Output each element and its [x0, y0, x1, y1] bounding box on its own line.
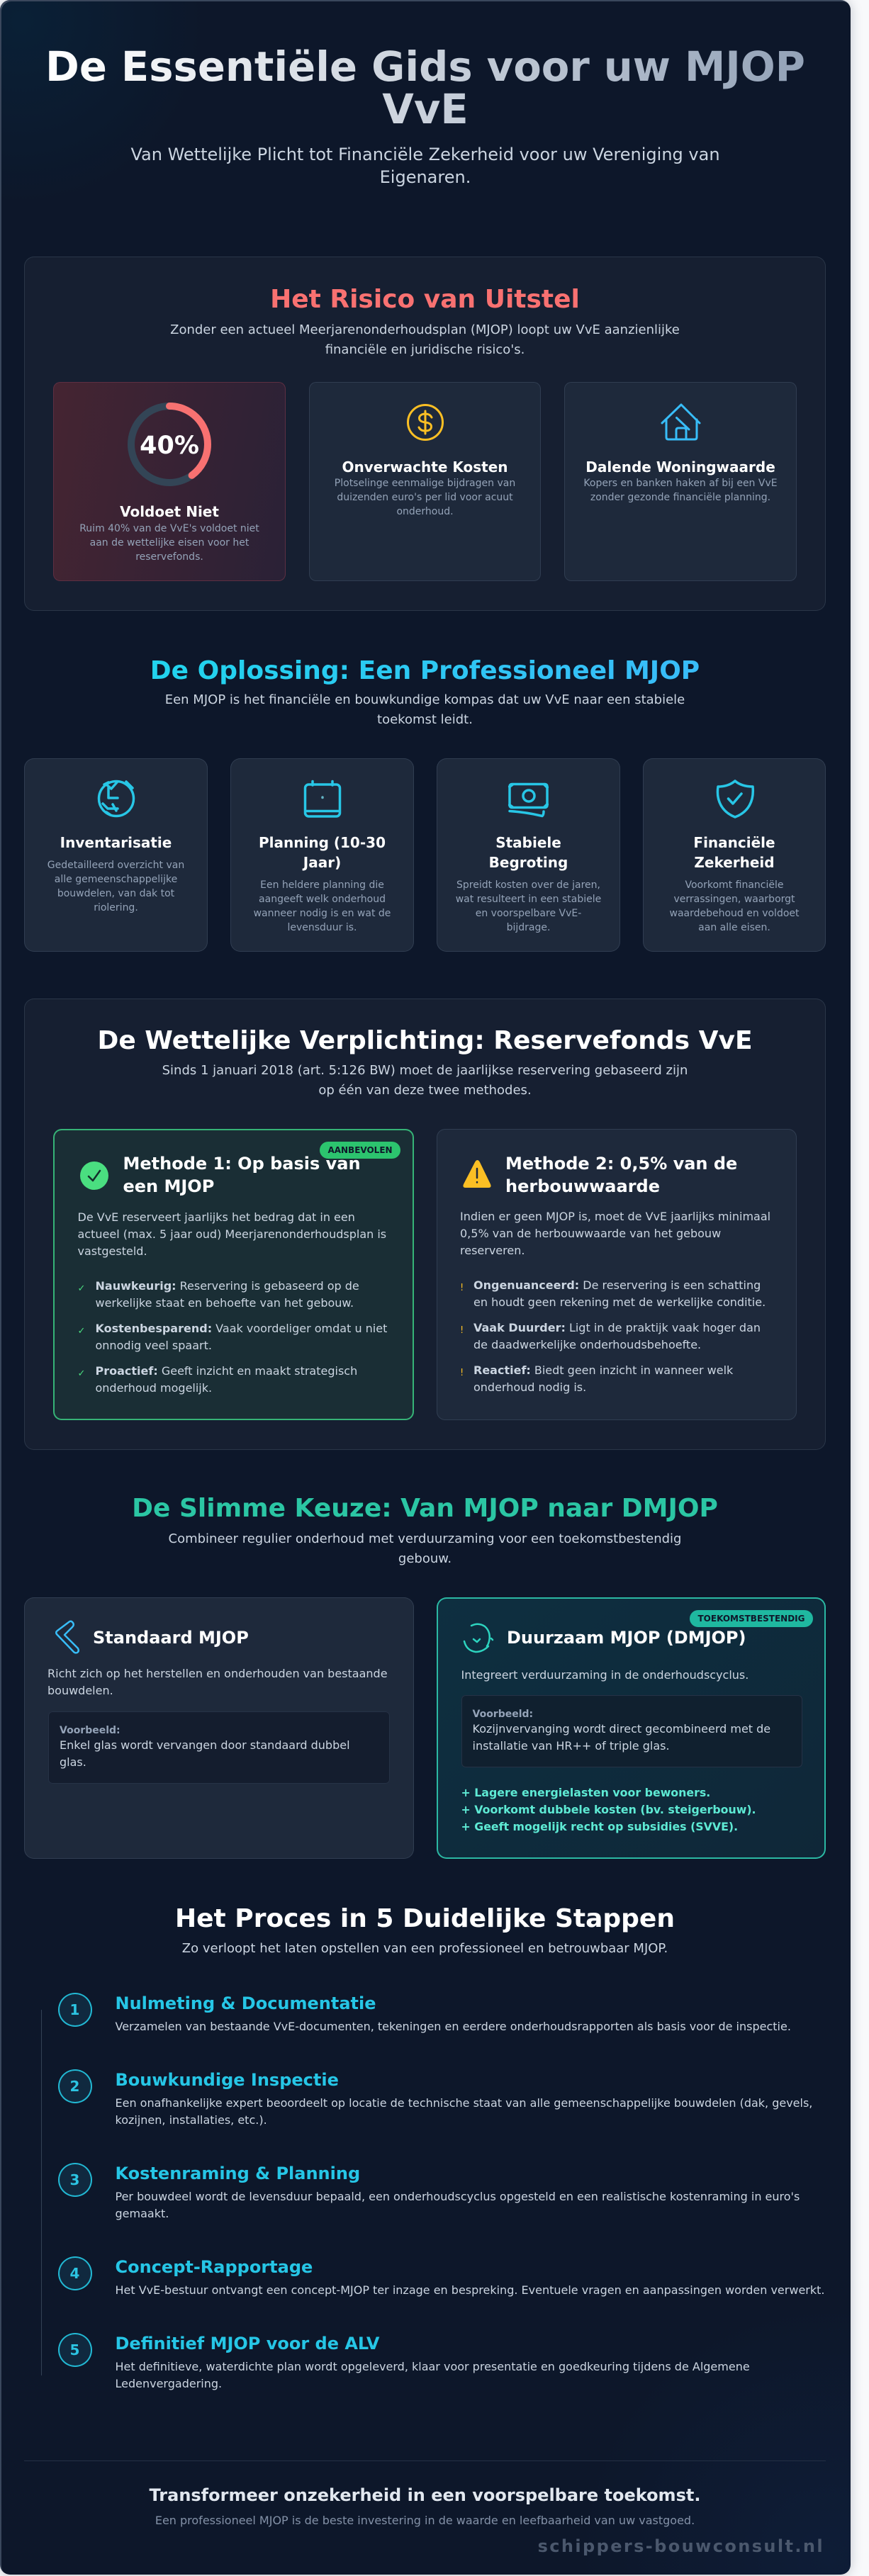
step title: Concept-Rapportage — [115, 2257, 313, 2277]
step number: 3 — [70, 2171, 79, 2188]
card text: bouwdelen, van dak tot — [57, 888, 174, 899]
card text: Spreidt kosten over de jaren, — [456, 879, 600, 891]
card text: aan de wettelijke eisen voor het — [90, 537, 249, 549]
icon: shield check — [716, 780, 754, 819]
card text: zonder gezonde financiële planning. — [590, 492, 770, 503]
card text: duizenden euro's per lid voor acuut — [337, 492, 513, 503]
step number — [58, 2333, 92, 2367]
card text: alle gemeenschappelijke — [55, 874, 177, 885]
icon: calendar — [303, 780, 342, 818]
step text: Het definitieve, waterdichte plan wordt opgeleverd, klaar voor presentatie en goedkeuring tijdens de Algemene — [115, 2360, 750, 2373]
text: solution intro: Een MJOP is het financiële en bouwkundige kompas dat uw VvE naar een stabiele — [165, 692, 685, 707]
point: reactief: ! — [460, 1368, 464, 1378]
card text: onderhoud. — [396, 506, 454, 517]
method 1 text: actueel (max. 5 jaar oud) Meerjarenonderhoudsplan is — [78, 1227, 386, 1241]
benefits list: + Voorkomt dubbele kosten (bv. steigerbouw). — [461, 1803, 756, 1816]
method 2 text: reserveren. — [460, 1244, 525, 1257]
example box — [461, 1695, 802, 1767]
icon: warning triangle — [463, 1160, 491, 1188]
card text — [47, 1667, 388, 1697]
text: solution intro — [165, 692, 685, 727]
card heading: Duurzaam MJOP (DMJOP) — [507, 1628, 746, 1648]
step number: 1 — [70, 2001, 79, 2018]
example text: glas. — [60, 1755, 86, 1769]
closing statement: Transformeer onzekerheid in een voorspelbare toekomst. — [150, 2485, 700, 2505]
method 2 heading: Methode 2: 0,5% van de — [505, 1154, 737, 1174]
card text: bijdrage. — [507, 922, 550, 933]
step text — [115, 2095, 812, 2128]
donut chart: 40 percent: 40% — [140, 432, 199, 460]
heading: risk: Het Risico van Uitstel — [270, 285, 580, 314]
card title: Planning (10-30 — [259, 834, 386, 851]
title: De Essentiële Gids voor uw MJOP — [45, 43, 805, 91]
card: standaard mjop — [24, 1597, 414, 1859]
example text — [472, 1721, 770, 1755]
title: VvE — [382, 86, 469, 133]
card: duurzaam mjop — [437, 1597, 826, 1859]
step 4 — [58, 2256, 825, 2307]
card text: Kopers en banken haken af bij een VvE — [583, 478, 778, 489]
card: planning — [230, 758, 414, 952]
card: onverwachte kosten — [309, 382, 541, 581]
card title: Financiële — [693, 834, 775, 851]
card title — [489, 834, 568, 871]
card: method 1 — [53, 1129, 414, 1420]
point: nauwkeurig: ✓ — [78, 1283, 85, 1294]
point: kostenbesparend — [78, 1321, 387, 1352]
point: kostenbesparend: Kostenbesparend: Vaak voordeliger omdat u niet — [95, 1321, 387, 1335]
point: vaak duurder: ! — [460, 1325, 464, 1336]
text: legal intro: Sinds 1 januari 2018 (art. 5:126 BW) moet de jaarlijkse reservering gebaseerd zijn — [162, 1063, 688, 1078]
step number: 4 — [70, 2265, 79, 2282]
text: smart choice intro: gebouw. — [398, 1551, 452, 1566]
card title — [259, 834, 386, 871]
method 2 heading — [505, 1154, 737, 1196]
card text: verrassingen, waarborgt — [673, 894, 795, 905]
step title: Nulmeting & Documentatie — [115, 1993, 376, 2013]
method 2 heading: herbouwwaarde — [505, 1176, 660, 1196]
example box — [48, 1711, 390, 1784]
example text: Kozijnvervanging wordt direct gecombineerd met de — [472, 1722, 770, 1736]
card text — [254, 879, 391, 933]
card text: Plotselinge eenmalige bijdragen van — [335, 478, 515, 489]
point: vaak duurder — [460, 1321, 761, 1351]
card text: levensduur is. — [287, 922, 357, 933]
step title: Kostenraming & Planning — [115, 2164, 360, 2183]
donut chart: 40 percent — [128, 403, 211, 486]
point: reactief: Reactief: Biedt geen inzicht in wanneer welk — [473, 1363, 733, 1377]
point: reactief — [460, 1363, 733, 1394]
icon: globe — [98, 780, 135, 818]
card text — [583, 478, 778, 503]
panel: risk of delay — [24, 257, 826, 611]
heading: legal: De Wettelijke Verplichting: Reservefonds VvE — [97, 1026, 753, 1055]
heading: solution: De Oplossing: Een Professioneel MJOP — [150, 656, 700, 685]
method 1 text: vastgesteld. — [78, 1244, 147, 1258]
step title: Bouwkundige Inspectie — [115, 2070, 339, 2090]
card text: aan alle eisen. — [698, 922, 770, 933]
card: inventarisatie — [24, 758, 208, 952]
text: legal intro — [162, 1063, 688, 1098]
card heading: Standaard MJOP — [93, 1628, 249, 1648]
badge: aanbevolen: AANBEVOLEN — [327, 1145, 393, 1155]
card title: Zekerheid — [694, 854, 775, 871]
text: solution intro: toekomst leidt. — [377, 712, 473, 727]
closing text: Een professioneel MJOP is de beste investering in de waarde en leefbaarheid van uw vastgoed. — [155, 2514, 695, 2527]
point: ongenuanceerd: Ongenuanceerd: De reservering is een schatting — [473, 1278, 761, 1292]
method 1 text — [78, 1210, 386, 1258]
benefits list — [461, 1784, 756, 1835]
point: nauwkeurig: werkelijke staat en behoefte van het gebouw. — [95, 1295, 354, 1310]
section: process — [24, 1899, 826, 2402]
step 2 — [58, 2069, 825, 2137]
subtitle: Van Wettelijke Plicht tot Financiële Zekerheid voor uw Vereniging van — [130, 145, 720, 164]
method 2 text: Indien er geen MJOP is, moet de VvE jaarlijks minimaal — [460, 1210, 770, 1223]
title — [0, 46, 851, 131]
benefits list: + Geeft mogelijk recht op subsidies (SVVE). — [461, 1820, 738, 1833]
card title: Stabiele — [495, 834, 561, 851]
badge: aanbevolen — [320, 1142, 400, 1159]
heading: smart choice: De Slimme Keuze: Van MJOP naar DMJOP — [132, 1494, 718, 1523]
text: smart choice intro: Combineer regulier onderhoud met verduurzaming voor een toekomstbestendig — [169, 1531, 681, 1546]
card text: riolering. — [94, 902, 138, 913]
card text — [669, 879, 800, 933]
example label: Voorbeeld: — [60, 1725, 120, 1736]
icon: standard — [55, 1620, 79, 1654]
card text: wat resulteert in een stabiele — [456, 894, 601, 905]
text: process intro: Zo verloopt het laten opstellen van een professioneel en betrouwbaar MJOP. — [182, 1941, 668, 1956]
method 1 heading: een MJOP — [123, 1176, 214, 1196]
card: stabiele begroting — [437, 758, 620, 952]
card: method 2 — [437, 1129, 797, 1420]
example text: Enkel glas wordt vervangen door standaard dubbel — [60, 1738, 350, 1752]
point: ongenuanceerd — [460, 1278, 766, 1309]
icon: banknote — [508, 782, 549, 818]
card text: wanneer nodig is en wat de — [254, 908, 391, 919]
step text: Ledenvergadering. — [115, 2377, 222, 2390]
section: solution — [24, 656, 826, 952]
text: risk intro: Zonder een actueel Meerjarenonderhoudsplan (MJOP) loopt uw VvE aanzienlijke — [170, 322, 680, 337]
step text — [115, 2188, 800, 2222]
method 1 heading — [123, 1154, 361, 1196]
method 1 text: De VvE reserveert jaarlijks het bedrag dat in een — [78, 1210, 355, 1224]
point: kostenbesparend: ✓ — [78, 1325, 85, 1337]
step number — [58, 1993, 92, 2027]
step text: Een onafhankelijke expert beoordeelt op locatie de technische staat van alle gemeenschappelijke bouwdelen (dak, gevels, — [115, 2096, 812, 2110]
point: proactief: ✓ — [78, 1368, 85, 1379]
point: ongenuanceerd: ! — [460, 1283, 464, 1293]
point: kostenbesparend: onnodig veel spaart. — [95, 1338, 212, 1352]
card text: Gedetailleerd overzicht van — [47, 860, 184, 871]
step number: 2 — [70, 2078, 79, 2095]
method 2 text: 0,5% van de herbouwwaarde van het gebouw — [460, 1227, 721, 1240]
card text: Integreert verduurzaming in de onderhoudscyclus. — [461, 1668, 749, 1681]
card: dalende woningwaarde — [564, 382, 797, 581]
point: reactief: onderhoud nodig is. — [473, 1380, 586, 1394]
card title — [693, 834, 775, 871]
card title: Begroting — [489, 854, 568, 871]
step number — [58, 2163, 92, 2197]
card text: reservefonds. — [135, 551, 203, 563]
heading: solution — [24, 656, 826, 687]
point: vaak duurder: de daadwerkelijke onderhoudsbehoefte. — [473, 1338, 701, 1351]
website watermark: schippers-bouwconsult.nl — [538, 2536, 824, 2556]
method 1 heading: Methode 1: Op basis van — [123, 1154, 361, 1174]
step text — [115, 2358, 750, 2392]
badge: toekomstbestendig — [690, 1610, 813, 1627]
icon: sustainable — [464, 1623, 493, 1653]
card title: Jaar) — [303, 854, 341, 871]
card text: aangeeft welk onderhoud — [259, 894, 386, 905]
text: risk intro: financiële en juridische risico's. — [325, 342, 525, 357]
step text: Het VvE-bestuur ontvangt een concept-MJOP ter inzage en bespreking. Eventuele vragen en aanpassingen worden verwerkt. — [115, 2283, 824, 2297]
card title: Voldoet Niet — [120, 503, 219, 520]
heading: process: Het Proces in 5 Duidelijke Stappen — [175, 1904, 675, 1933]
subtitle — [130, 145, 720, 187]
step text: kozijnen, installaties, etc.). — [115, 2113, 267, 2127]
method 2 text — [460, 1210, 770, 1257]
card text — [47, 860, 184, 913]
icon: check circle — [80, 1162, 108, 1190]
section: smart choice — [24, 1494, 826, 1859]
icon: house — [661, 403, 701, 441]
step text: Verzamelen van bestaande VvE-documenten, tekeningen en eerdere onderhoudsrapporten als basis voor de inspectie. — [115, 2020, 791, 2033]
card text: en voorspelbare VvE- — [476, 908, 581, 919]
badge: toekomstbestendig: TOEKOMSTBESTENDIG — [697, 1614, 805, 1624]
step text: Per bouwdeel wordt de levensduur bepaald, een onderhoudscyclus opgesteld en een realistische kostenraming in euro's — [115, 2190, 800, 2203]
benefits list: + Lagere energielasten voor bewoners. — [461, 1786, 710, 1799]
step number — [58, 2069, 92, 2103]
card text: bouwdelen. — [47, 1684, 113, 1697]
point: nauwkeurig: Nauwkeurig: Reservering is gebaseerd op de — [95, 1278, 359, 1293]
step number: 5 — [70, 2341, 79, 2358]
panel: legal obligation — [24, 999, 826, 1450]
icon: dollar coin — [407, 404, 444, 441]
subtitle: Eigenaren. — [380, 167, 471, 187]
step 1 — [58, 1993, 825, 2044]
footer — [24, 2460, 826, 2560]
example text — [60, 1738, 350, 1769]
card title: Dalende Woningwaarde — [585, 458, 775, 475]
card text — [79, 523, 259, 563]
card text: Voorkomt financiële — [685, 879, 783, 891]
point: proactief: onderhoud mogelijk. — [95, 1380, 212, 1395]
point: proactief — [78, 1363, 357, 1395]
point: ongenuanceerd: en houdt geen rekening met de werkelijke conditie. — [473, 1295, 766, 1309]
point: nauwkeurig — [78, 1278, 359, 1310]
card: financiele zekerheid — [643, 758, 826, 952]
card text: waardebehoud en voldoet — [669, 908, 800, 919]
text: smart choice intro — [169, 1531, 681, 1566]
step number — [58, 2256, 92, 2290]
card title: Onverwachte Kosten — [342, 458, 508, 475]
step 5 — [58, 2333, 825, 2401]
card: voldoet niet — [53, 382, 286, 581]
example label: Voorbeeld: — [472, 1709, 533, 1720]
example text: installatie van HR++ of triple glas. — [472, 1739, 670, 1753]
step text: gemaakt. — [115, 2207, 169, 2220]
card text — [456, 879, 601, 933]
card text — [335, 478, 515, 517]
point: vaak duurder: Vaak Duurder: Ligt in de praktijk vaak hoger dan — [473, 1321, 761, 1334]
card text: Richt zich op het herstellen en onderhouden van bestaande — [47, 1667, 388, 1680]
step 3 — [58, 2163, 825, 2231]
text: legal intro: op één van deze twee methodes. — [318, 1083, 532, 1098]
step title: Definitief MJOP voor de ALV — [115, 2334, 380, 2353]
card text: Een heldere planning die — [260, 879, 384, 891]
text: risk intro — [170, 322, 680, 357]
card title: Inventarisatie — [60, 834, 172, 851]
point: proactief: Proactief: Geeft inzicht en maakt strategisch — [95, 1363, 357, 1378]
card text: Ruim 40% van de VvE's voldoet niet — [79, 523, 259, 534]
